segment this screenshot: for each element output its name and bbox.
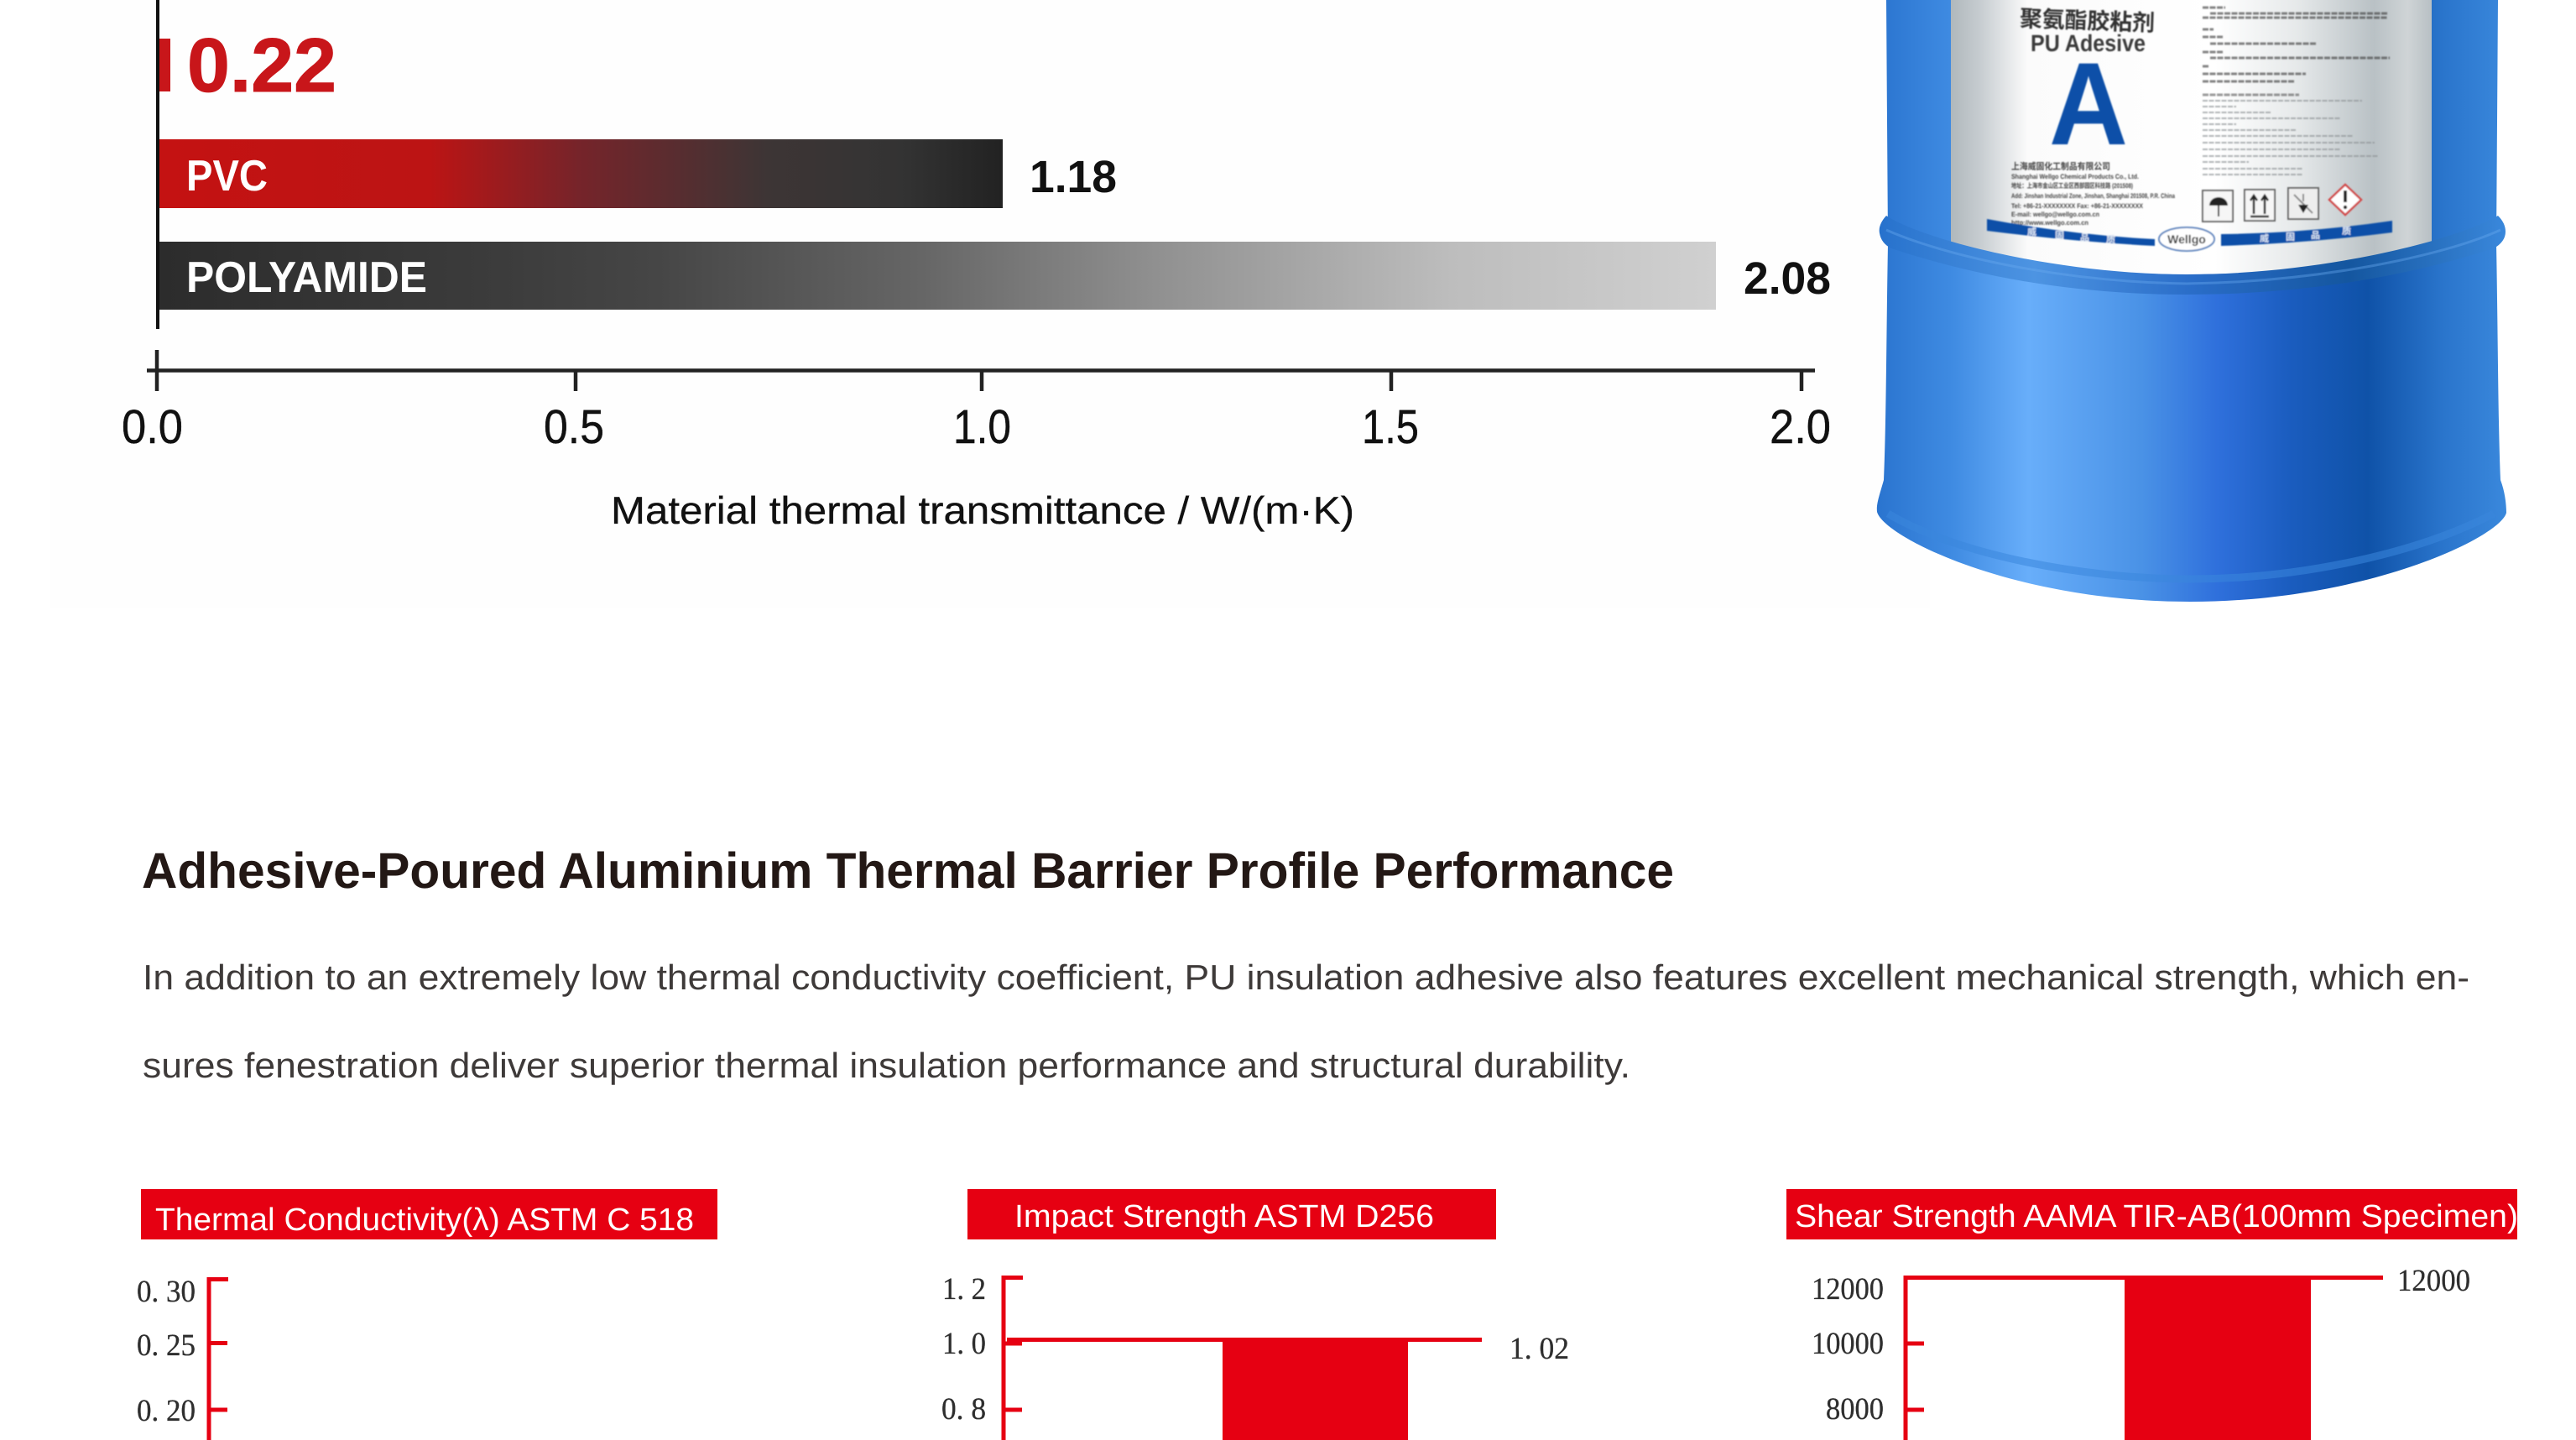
blue band right: 质 <box>2342 226 2351 237</box>
axis labels: 0. 20 <box>137 1394 196 1428</box>
blue band right: 品 <box>2311 231 2320 241</box>
section heading: Adhesive-Poured Aluminium Thermal Barrier Profile Performance <box>142 843 1674 899</box>
manufacturer details: Tel: +86-21-XXXXXXXX Fax: +86-21-XXXXXXXX <box>2011 202 2144 210</box>
manufacturer details: Add: Jinshan Industrial Zone, Jinshan, Shanghai 201508, P.R. China <box>2011 192 2175 200</box>
chart header <box>1786 1189 2518 1239</box>
bar: Polyamide 2.08: 2.08 <box>1744 253 1831 304</box>
blue band left <box>1987 219 2155 246</box>
bar: PVC 1.18: 1.18 <box>1030 152 1117 202</box>
blue band right: 固 <box>2286 232 2295 243</box>
handling icon: this way up <box>2245 190 2275 221</box>
horizontal value axis <box>122 350 1831 454</box>
bar: 1.02: 1. 02 <box>1510 1332 1569 1366</box>
horizontal value axis: 1.5 <box>1362 400 1419 454</box>
component letter A: A <box>2049 38 2128 170</box>
axis labels: 0. 8 <box>941 1392 986 1427</box>
top rim <box>1880 216 2506 295</box>
drum label <box>1951 0 2432 274</box>
faint chart background panel <box>50 0 1930 608</box>
horizontal value axis: 2.0 <box>1770 400 1831 454</box>
handling icon: fragile <box>2288 188 2318 219</box>
blue band left: 质 <box>2106 234 2115 245</box>
chart header: Shear Strength AAMA TIR-AB(100mm Specimen) <box>1795 1199 2518 1234</box>
axis and ticks <box>1002 1276 1023 1440</box>
axis labels: 0. 25 <box>137 1328 196 1363</box>
top rim highlight <box>1886 230 2500 284</box>
hazard diamond <box>2329 185 2361 215</box>
axis labels: 1. 0 <box>942 1327 986 1361</box>
product name English: PU Adesive <box>2031 30 2146 56</box>
drum body <box>1877 0 2506 602</box>
chart: shear strength <box>1786 1189 2518 1440</box>
axis labels <box>941 1272 986 1427</box>
Wellgo logo: Wellgo <box>2167 232 2206 246</box>
bar: 12000 <box>1906 1264 2470 1440</box>
axis labels: 0. 30 <box>137 1275 196 1309</box>
manufacturer details: 上海威固化工制品有限公司 <box>2011 161 2110 172</box>
axis labels: 8000 <box>1826 1392 1884 1427</box>
product image: PU adhesive drum <box>1877 0 2506 602</box>
blue band right <box>2221 221 2392 246</box>
axis labels: 10000 <box>1812 1327 1884 1361</box>
chart: impact strength <box>941 1189 1569 1440</box>
manufacturer details: 地址：上海市金山区工业区西部园区科技路 (201508) <box>2011 182 2133 190</box>
chart header <box>141 1189 717 1239</box>
chart: material thermal transmittance <box>122 0 1831 532</box>
Wellgo logo <box>2159 227 2214 251</box>
label contents <box>1987 6 2392 251</box>
blue band left: 威 <box>2027 227 2036 237</box>
vertical category axis <box>156 0 159 329</box>
axis and ticks <box>207 1277 228 1440</box>
bar: 12000: 12000 <box>2397 1264 2470 1298</box>
axis labels <box>1812 1272 1884 1427</box>
manufacturer details <box>2011 161 2175 227</box>
bottom rim highlight <box>1888 514 2494 579</box>
chart: thermal conductivity <box>137 1189 717 1440</box>
bar: PVC 1.18 <box>159 139 1117 208</box>
blue band left: 品 <box>2080 233 2089 243</box>
handling icon: keep dry <box>2203 190 2233 222</box>
bar: Polyamide 2.08: POLYAMIDE <box>186 253 427 302</box>
product name: 聚氨酯胶粘剂 <box>2019 6 2155 36</box>
bar: 1.02 <box>1007 1332 1569 1440</box>
bar: PVC 1.18: PVC <box>186 152 268 201</box>
horizontal value axis: 0.0 <box>122 400 183 454</box>
chart header: Thermal Conductivity(λ) ASTM C 518 <box>155 1203 694 1238</box>
intro paragraph <box>143 957 2469 1085</box>
intro paragraph: sures fenestration deliver superior thermal insulation performance and structural durability. <box>143 1046 1630 1085</box>
blue band left: 固 <box>2055 231 2064 241</box>
chart header: Impact Strength ASTM D256 <box>1014 1199 1434 1234</box>
bar: Polyamide 2.08 <box>159 242 1831 310</box>
chart header <box>967 1189 1496 1239</box>
axis labels: 12000 <box>1812 1272 1884 1307</box>
axis and ticks <box>1904 1276 1926 1440</box>
manufacturer details: E-mail: wellgo@wellgo.com.cn <box>2011 211 2099 218</box>
axis title: Material thermal transmittance / W/(m·K) <box>611 488 1354 532</box>
horizontal value axis: 1.0 <box>953 400 1011 454</box>
blurred instruction microtext, illegible in the reference <box>2203 8 2390 81</box>
blue band right: 威 <box>2260 233 2269 244</box>
manufacturer details: Shanghai Wellgo Chemical Products Co., Ltd. <box>2011 173 2139 180</box>
horizontal value axis: 0.5 <box>544 400 604 454</box>
manufacturer details: http://www.wellgo.com.cn <box>2011 219 2088 227</box>
value: PU 0.22: 0.22 <box>187 23 336 108</box>
axis labels <box>137 1275 196 1428</box>
intro paragraph: In addition to an extremely low thermal conductivity coefficient, PU insulation adhesive also features excellent mechanical strength, which en- <box>143 957 2469 997</box>
axis labels: 1. 2 <box>942 1272 986 1307</box>
